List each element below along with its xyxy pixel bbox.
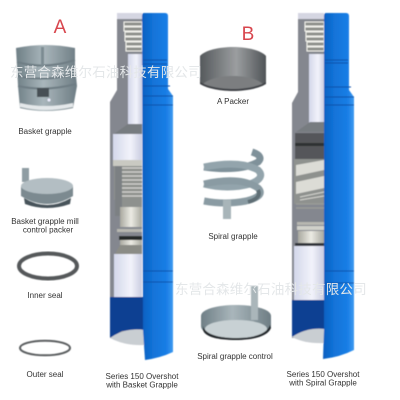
watermark: bottom: 东营合森维尔石油科技有限公司 bbox=[175, 282, 367, 297]
body cutaway bbox=[292, 13, 324, 338]
lower bore bbox=[294, 246, 324, 300]
overshot with spiral grapple bbox=[292, 13, 354, 359]
dark blue inner wall bbox=[292, 300, 324, 337]
label: A packer: A Packer bbox=[217, 97, 249, 106]
heading: B: B bbox=[242, 24, 254, 45]
label: series 150 overshot with basket grapple: Series 150 Overshot bbox=[106, 372, 179, 381]
packer band bbox=[295, 133, 324, 159]
blue outer sleeve bbox=[323, 13, 354, 359]
icon: spiral grapple control bbox=[201, 286, 271, 340]
threads bbox=[124, 22, 142, 51]
blue outer sleeve bbox=[142, 13, 173, 360]
icon: inner seal bbox=[19, 254, 77, 278]
bore bbox=[128, 54, 142, 124]
label: spiral grapple: Spiral grapple bbox=[208, 232, 258, 241]
icon: A packer bbox=[200, 47, 266, 91]
grapple threads bbox=[113, 160, 142, 166]
label: outer seal: Outer seal bbox=[27, 370, 64, 379]
threads bbox=[305, 22, 324, 51]
icon: basket grapple mill control packer bbox=[21, 168, 73, 208]
label: spiral grapple control: Spiral grapple control bbox=[197, 352, 273, 361]
label: series 150 overshot with basket grapple: with Basket Grapple bbox=[105, 380, 178, 390]
watermark: top: 东营合森维尔石油科技有限公司 bbox=[10, 65, 202, 80]
heading: A: A bbox=[54, 17, 67, 38]
body cutaway bbox=[110, 13, 142, 338]
overshot with basket grapple bbox=[110, 13, 173, 360]
icon: basket grapple bbox=[16, 45, 77, 111]
label: mill control packer: Basket grapple mill bbox=[11, 217, 79, 226]
label: series 150 overshot with spiral grapple: Series 150 Overshot bbox=[287, 370, 360, 379]
label: series 150 overshot with spiral grapple: with Spiral Grapple bbox=[288, 378, 357, 388]
label: mill control packer: control packer bbox=[23, 226, 73, 234]
dark blue inner wall bbox=[110, 297, 143, 338]
icon: spiral grapple bbox=[204, 152, 261, 219]
label: basket grapple: Basket grapple bbox=[18, 127, 72, 136]
label: inner seal: Inner seal bbox=[27, 291, 63, 300]
icon: outer seal bbox=[20, 341, 70, 355]
bore bbox=[309, 54, 324, 124]
lower bore bbox=[114, 254, 142, 297]
spiral grapple section bbox=[294, 159, 324, 204]
